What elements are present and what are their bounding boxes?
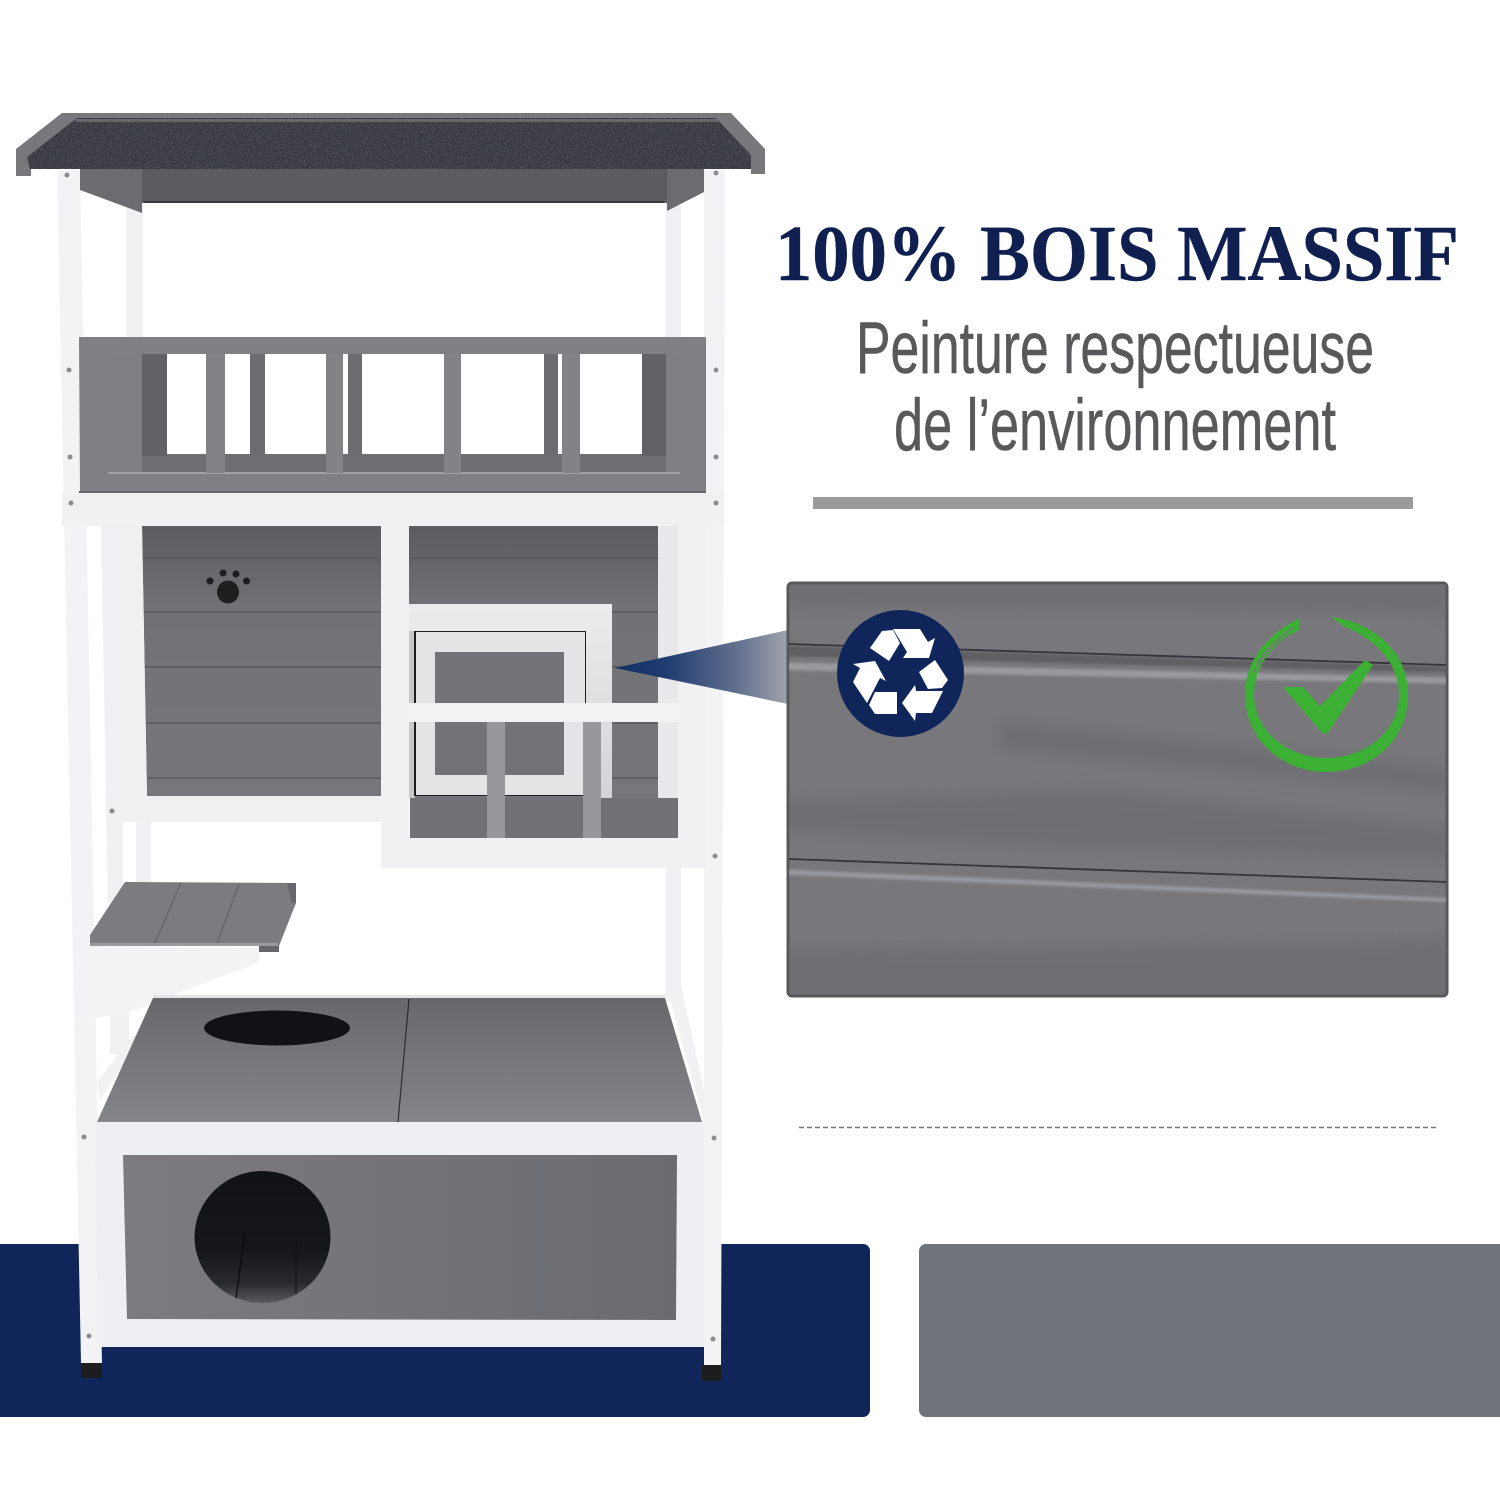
title: 100% BOIS MASSIF: [775, 211, 1459, 298]
wall planks: [142, 526, 381, 796]
ledge plank lines: [154, 883, 239, 946]
ledge bracket: [90, 946, 259, 1019]
top hole: [204, 1010, 350, 1046]
plank lines: [409, 558, 659, 778]
door window: [435, 652, 564, 775]
box top: [97, 998, 702, 1122]
balcony back rail: [142, 454, 667, 474]
subtitle: [856, 308, 1374, 466]
box white frame: [95, 1122, 704, 1347]
wood seam lines: [788, 644, 1447, 882]
roof underside: [142, 165, 667, 203]
wood texture: [789, 584, 1446, 995]
right house wall: [381, 526, 706, 868]
feet: [81, 1363, 721, 1381]
recycling arrows: [853, 629, 948, 721]
plank lines: [143, 558, 381, 778]
cat house product illustration: [16, 113, 765, 1381]
callout pointer: [615, 630, 788, 704]
box front panel: [123, 1155, 677, 1320]
balcony back bars: [250, 354, 558, 456]
box top seam: [398, 999, 409, 1122]
outer right post: [704, 170, 725, 1365]
left house wall: [101, 526, 381, 905]
roof shingles: [27, 118, 751, 169]
check mark: [1283, 660, 1373, 734]
brush streaks: [1254, 627, 1294, 672]
roof: [16, 113, 765, 213]
balcony floor: [410, 798, 678, 838]
divider bar: [813, 497, 1413, 509]
upper balcony: [79, 337, 706, 493]
right roof bracket: [667, 168, 704, 211]
balcony side panels: [107, 354, 142, 474]
brush ring: [1245, 617, 1408, 772]
navy base band: [0, 1244, 870, 1417]
callout: wood detail panel: [786, 582, 1448, 998]
screws: [64, 170, 718, 1342]
dashed separator: [799, 1126, 1437, 1128]
side ledge: [90, 882, 296, 1019]
front hole: [194, 1171, 330, 1303]
wood seam highlights: [770, 645, 1470, 903]
door: [409, 604, 612, 798]
door surround: [409, 604, 612, 798]
white beam under balcony: [62, 493, 724, 526]
balcony outer frame: [79, 337, 706, 493]
wall planks: [409, 526, 659, 798]
icon: paw print: [206, 570, 250, 604]
grey base band: [919, 1244, 1500, 1417]
lower box: [95, 995, 704, 1347]
back posts: [110, 205, 681, 1054]
wood panel: [788, 583, 1447, 996]
outer left post: [57, 170, 102, 1363]
white balcony frame: [381, 526, 706, 868]
left wall white frame: [101, 526, 381, 905]
right wall white pillar: [658, 526, 678, 798]
roof trim: [16, 113, 765, 176]
subtitle: de l’environnement: [894, 385, 1336, 466]
icon: recycling badge: [837, 610, 964, 737]
balcony front bars: [206, 354, 580, 473]
icon: green check in brush circle: [1245, 617, 1408, 772]
door frame: [416, 632, 585, 795]
wood grain: [789, 584, 1446, 995]
balcony rail: [409, 703, 678, 722]
ledge top: [90, 882, 296, 946]
balcony rail bars: [487, 722, 601, 840]
lower frame braces: [97, 985, 704, 1122]
left roof bracket: [80, 168, 142, 213]
